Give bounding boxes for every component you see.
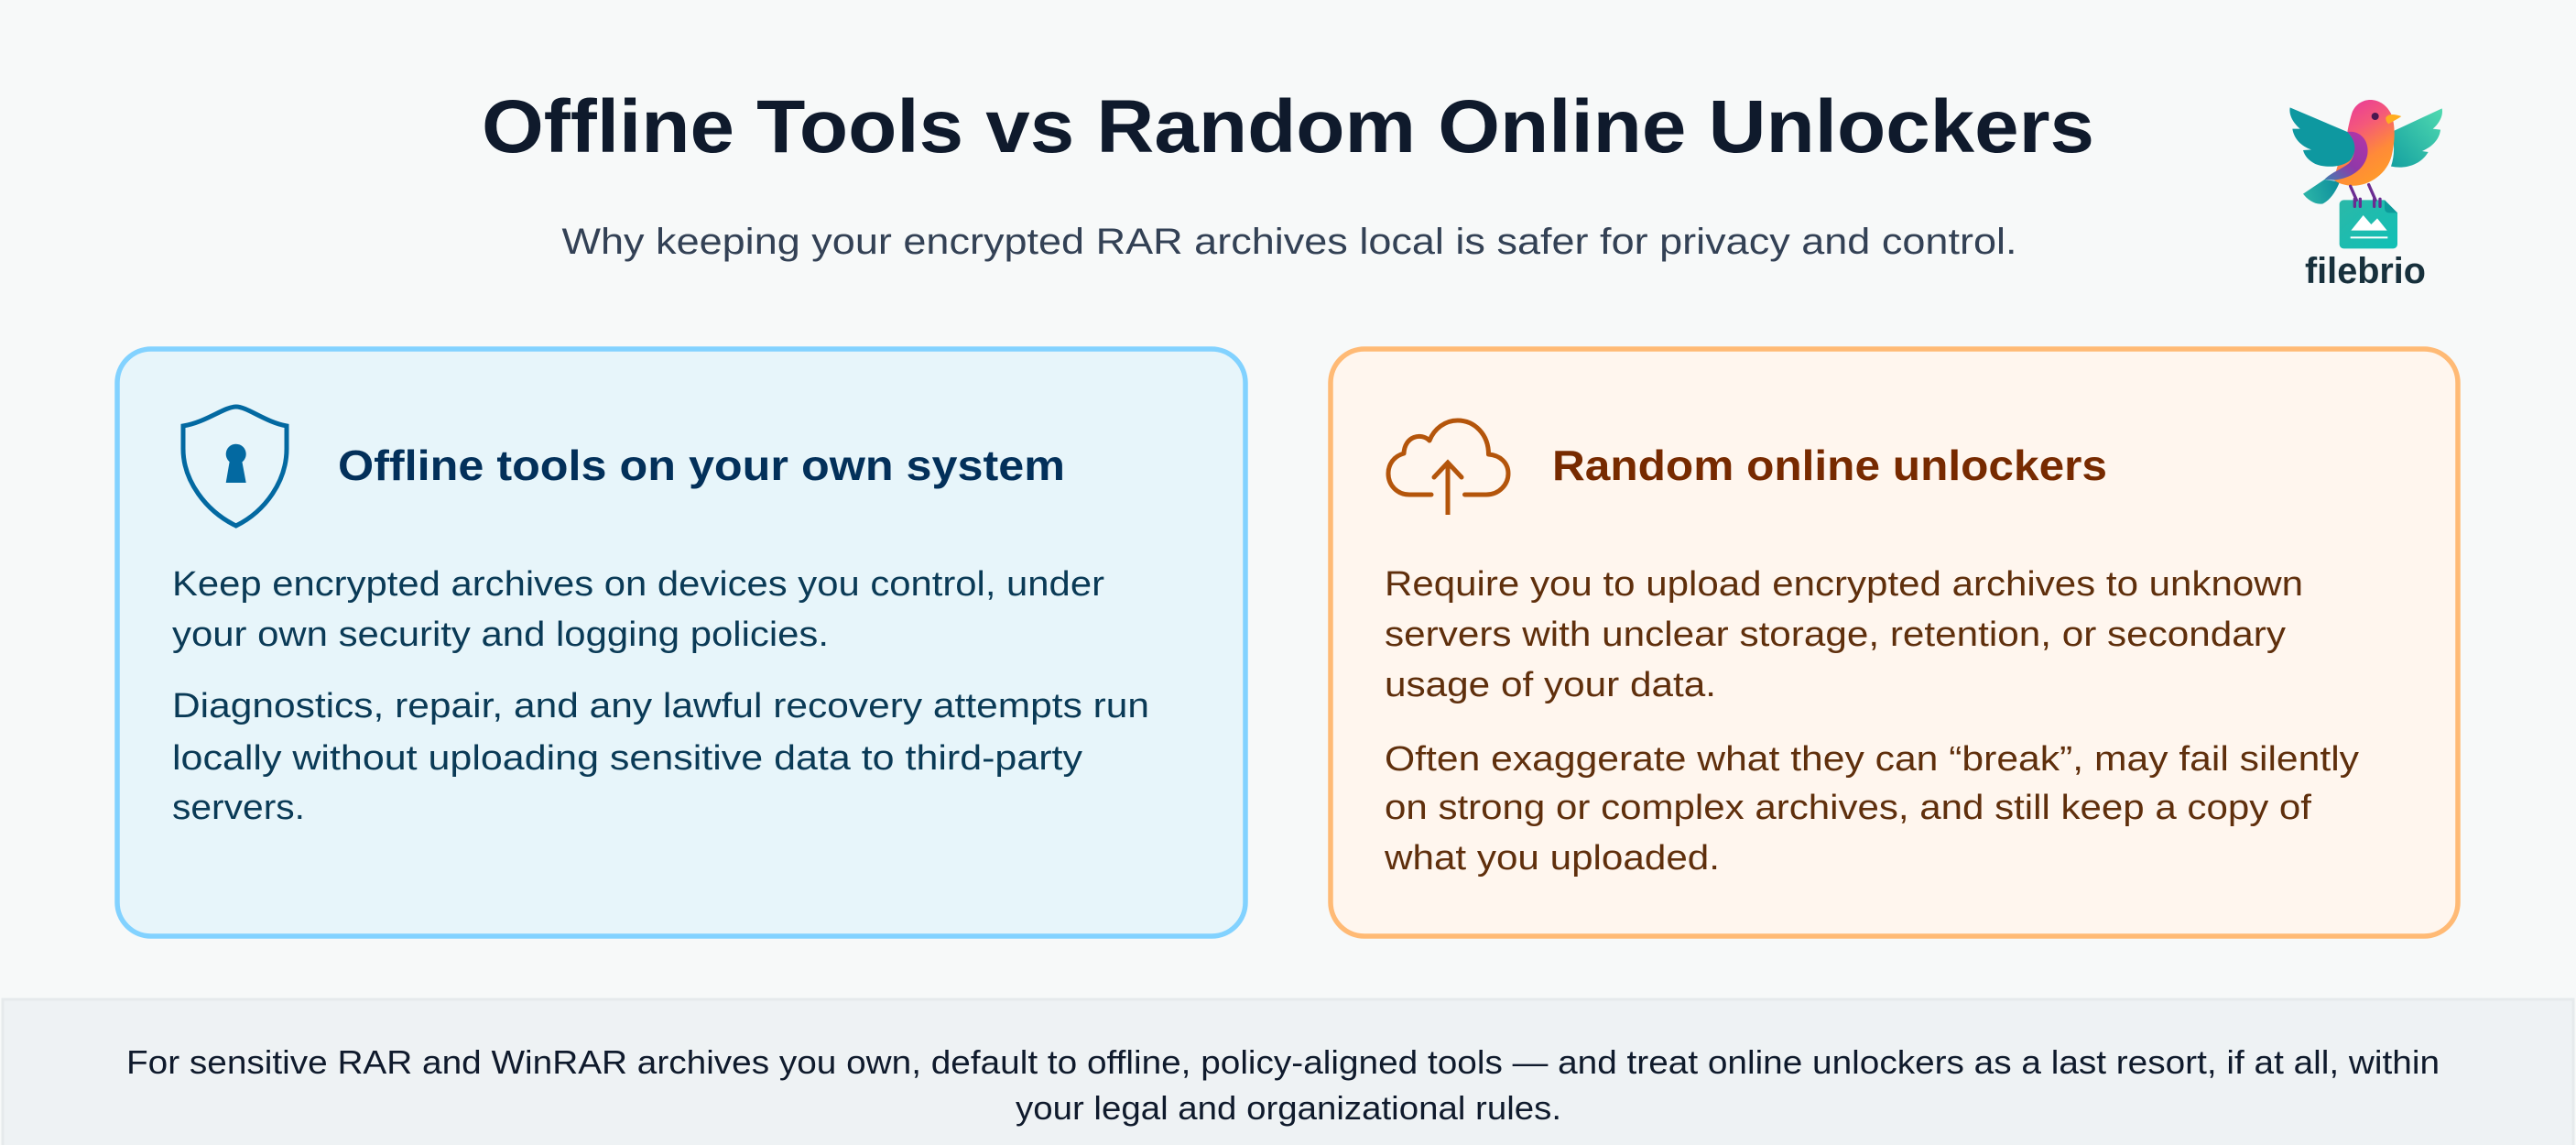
panel background	[117, 349, 1245, 936]
subtitle: Why keeping your encrypted RAR archives local is safer for privacy and control.	[562, 222, 2016, 262]
footer text: your legal and organizational rules.	[1016, 1089, 1561, 1127]
heading: offline tools: Offline tools on your own system	[338, 442, 1065, 489]
heading: online unlockers: Random online unlockers	[1552, 442, 2107, 489]
icon: cloud upload	[1388, 420, 1508, 515]
text block: online unlockers paragraphs	[1384, 565, 2359, 878]
footer text: For sensitive RAR and WinRAR archives you own, default to offline, policy-aligned tools — and treat online unlockers as a last resort, if at all, within	[126, 1043, 2440, 1081]
panel: offline tools	[117, 349, 1245, 936]
icon: shield with keyhole	[183, 407, 287, 526]
footer band	[3, 999, 2573, 1145]
text block: offline tools paragraphs: your own security and logging policies.	[172, 616, 829, 654]
footer text	[126, 1043, 2440, 1127]
text block: online unlockers paragraphs: what you uploaded.	[1384, 839, 1720, 878]
logo wordmark: filebrio	[2305, 251, 2426, 291]
text block: offline tools paragraphs: Diagnostics, repair, and any lawful recovery attempts run	[172, 687, 1149, 725]
logo: filebrio	[2289, 100, 2442, 291]
panel: online unlockers	[1331, 349, 2458, 936]
text block: online unlockers paragraphs: Often exaggerate what they can “break”, may fail silently	[1385, 740, 2359, 779]
footer callout	[3, 999, 2573, 1145]
text block: online unlockers paragraphs: on strong or complex archives, and still keep a copy of	[1385, 789, 2311, 827]
text block: offline tools paragraphs: locally without uploading sensitive data to third-party	[172, 739, 1082, 778]
icon: bird on document	[2289, 100, 2442, 248]
text block: offline tools paragraphs: Keep encrypted archives on devices you control, under	[172, 565, 1104, 604]
text block: offline tools paragraphs	[172, 565, 1149, 827]
text block: online unlockers paragraphs: usage of your data.	[1385, 666, 1716, 704]
panel background	[1331, 349, 2458, 936]
text block: offline tools paragraphs: servers.	[172, 789, 305, 827]
text block: online unlockers paragraphs: servers with unclear storage, retention, or secondary	[1385, 616, 2286, 654]
title: Offline Tools vs Random Online Unlockers	[482, 85, 2094, 169]
text block: online unlockers paragraphs: Require you to upload encrypted archives to unknown	[1385, 565, 2303, 604]
